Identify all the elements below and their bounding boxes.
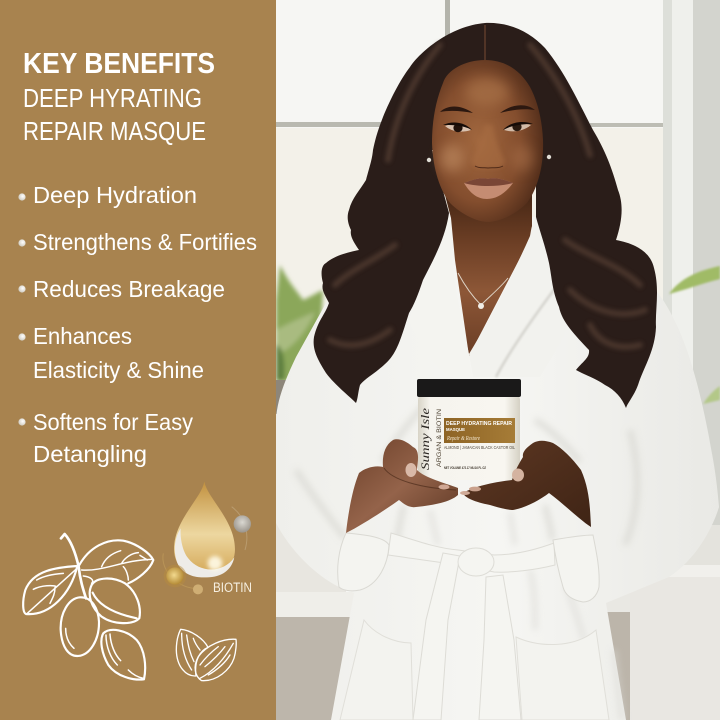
- lips: [464, 178, 513, 199]
- photo background: bright window and room: [276, 0, 720, 720]
- hair highlights: [330, 45, 645, 347]
- jar label block: [444, 418, 515, 443]
- product jar: [417, 379, 521, 480]
- plant pot: [276, 380, 289, 414]
- benefit: softens for easy detangling: Detangling: [33, 441, 147, 467]
- biotin label: BIOTIN: [213, 580, 252, 595]
- benefit: enhances elasticity and shine: Enhances: [33, 323, 132, 349]
- robe collars: [409, 213, 578, 377]
- benefit: softens for easy detangling: Softens for Easy: [33, 409, 193, 435]
- necklace: [458, 273, 508, 309]
- plant: left foliage: [276, 265, 323, 382]
- heading: KEY BENEFITS: [23, 48, 215, 80]
- benefit: reduces breakage: Reduces Breakage: [33, 276, 225, 302]
- woman: face: [427, 60, 551, 222]
- robe pockets: [340, 620, 609, 720]
- sleeve fold shading: [296, 400, 637, 545]
- jar ingredients: ALMOND | JAMAICAN BLACK CASTOR OIL: [444, 445, 516, 450]
- woman: bathrobe body: [276, 213, 719, 720]
- jar label block: Repair & Restore: [446, 436, 480, 442]
- left hand: [346, 439, 458, 533]
- benefit: enhances elasticity and shine: Elasticity & Shine: [33, 357, 204, 383]
- icon: almonds: [176, 629, 236, 681]
- subheading line 2: REPAIR MASQUE: [23, 118, 206, 146]
- right belt strand: [479, 575, 521, 720]
- left eye: [445, 124, 471, 132]
- jar label block: MASQUE: [446, 427, 465, 432]
- panel: key benefits: [0, 0, 276, 720]
- benefit: deep hydration: Deep Hydration: [33, 182, 197, 208]
- benefit: enhances elasticity and shine: [18, 323, 204, 383]
- right eye: [504, 124, 531, 131]
- jar label block: DEEP HYDRATING REPAIR: [446, 421, 512, 427]
- jar lid: [417, 379, 521, 397]
- plant: right foliage: [669, 266, 720, 404]
- robe belt and knot: [388, 533, 555, 720]
- torso fold shading: [430, 510, 622, 720]
- earrings: [427, 158, 431, 162]
- robe cuffs: [338, 533, 599, 602]
- subheading line 1: DEEP HYRATING: [23, 85, 202, 113]
- jar body: [418, 394, 520, 480]
- benefit: softens for easy detangling: [18, 409, 193, 467]
- woman: wavy hair: [314, 23, 657, 408]
- left belt strand: [413, 553, 460, 720]
- nose: [471, 125, 505, 168]
- right hand: [460, 441, 591, 527]
- icon: biotin drop: [163, 482, 251, 594]
- woman: neck and chest: [445, 195, 532, 356]
- benefit: strengthens and fortifies: Strengthens & Fortifies: [33, 229, 257, 255]
- eyebrows: [440, 105, 535, 113]
- jar net volume: NET VOLUME 472.17 ML/16 FL OZ: [444, 466, 486, 470]
- brand name: Sunny Isle: [418, 407, 432, 470]
- belt knot: [458, 548, 494, 576]
- icon: argan branch: [23, 534, 153, 680]
- jar sub-brand: ARGAN & BIOTIN: [436, 409, 443, 467]
